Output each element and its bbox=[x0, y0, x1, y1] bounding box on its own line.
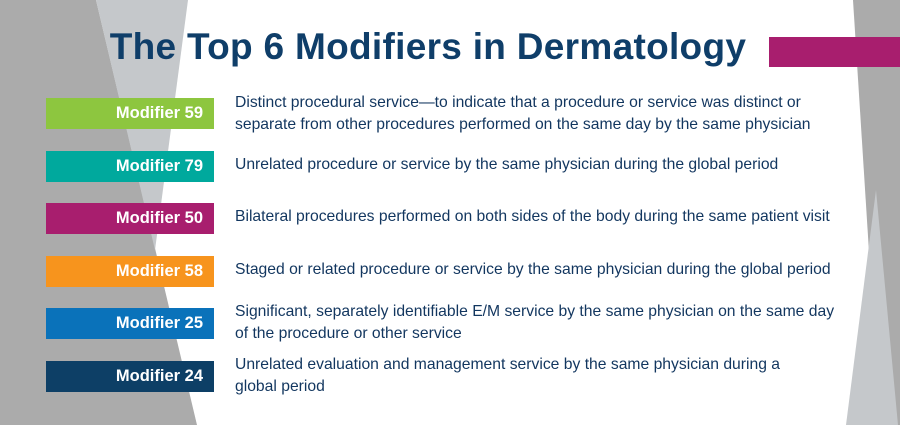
text: modifier 58: Staged or related procedure or service by the same physician during the global period bbox=[235, 261, 831, 278]
row: modifier 58 bbox=[46, 256, 214, 287]
row: modifier 24: Modifier 24 bbox=[116, 367, 203, 385]
row: modifier 50: Modifier 50 bbox=[116, 209, 203, 227]
row: modifier 59: Modifier 59 bbox=[116, 104, 203, 122]
text: modifier 24: Unrelated evaluation and management service by the same physician during a bbox=[235, 356, 780, 373]
row: modifier 79: Modifier 79 bbox=[116, 157, 203, 175]
text: modifier 50: Bilateral procedures performed on both sides of the body during the same patient visit bbox=[235, 208, 830, 225]
text: modifier 25: Significant, separately identifiable E/M service by the same physician on the same day bbox=[235, 303, 834, 320]
title: The Top 6 Modifiers in Dermatology bbox=[110, 26, 746, 67]
row: modifier 59 bbox=[46, 98, 214, 129]
text: modifier 79: Unrelated procedure or service by the same physician during the global period bbox=[235, 156, 778, 173]
text: modifier 24: global period bbox=[235, 378, 325, 394]
row: modifier 50 bbox=[46, 203, 214, 234]
text: modifier 24 bbox=[235, 356, 780, 394]
text: modifier 59 bbox=[235, 94, 811, 132]
row: modifier 24 bbox=[46, 361, 214, 392]
text: modifier 59: Distinct procedural service—to indicate that a procedure or service was distinct or bbox=[235, 94, 801, 111]
text: modifier 25: of the procedure or other service bbox=[235, 324, 462, 342]
text: modifier 25 bbox=[235, 303, 834, 342]
row: modifier 79 bbox=[46, 151, 214, 182]
row: modifier 25 bbox=[46, 308, 214, 339]
row: modifier 25: Modifier 25 bbox=[116, 314, 203, 332]
row: modifier 58: Modifier 58 bbox=[116, 262, 203, 280]
text: modifier 59: separate from other procedures performed on the same day by the same physician bbox=[235, 116, 811, 132]
